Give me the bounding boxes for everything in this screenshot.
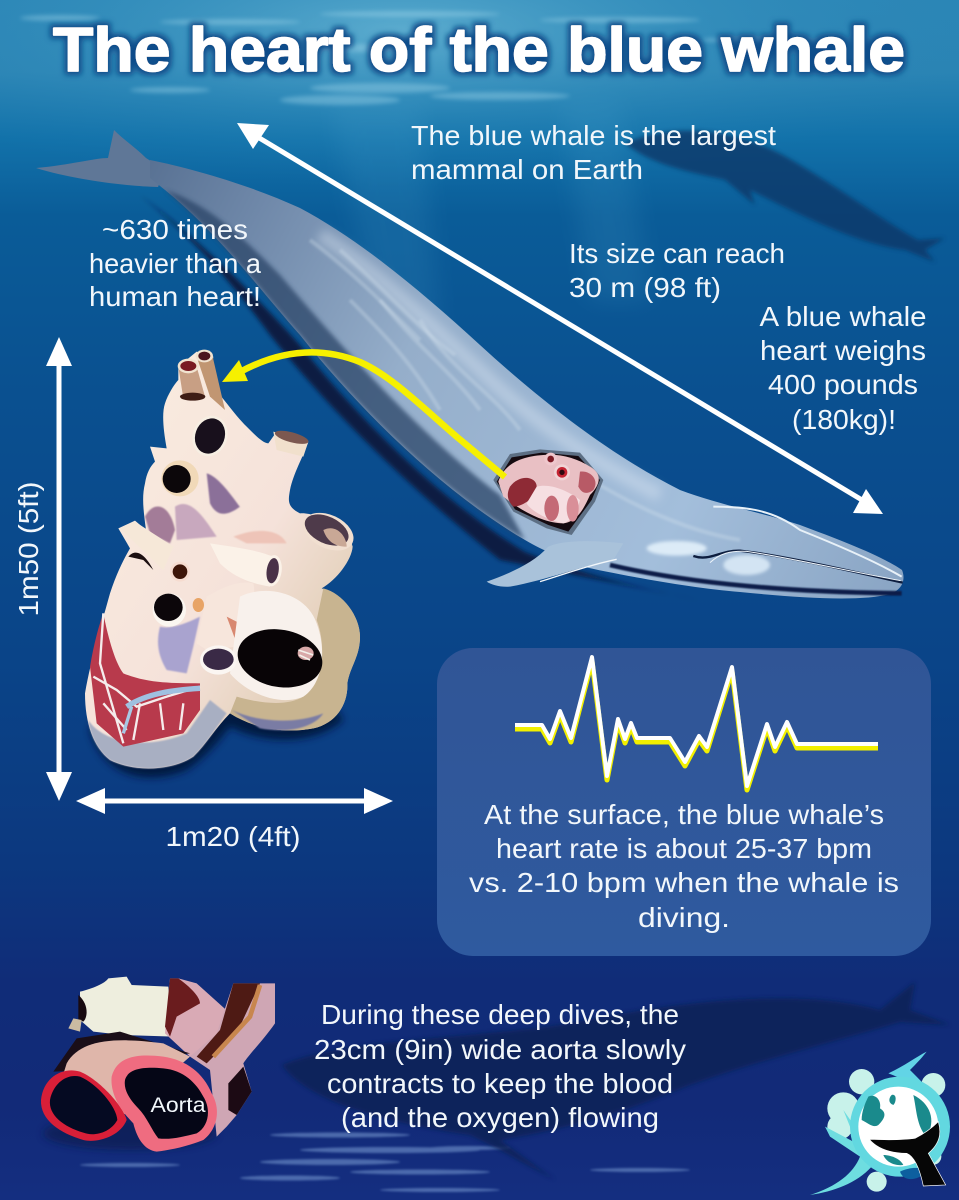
logo whale tail [869, 1122, 946, 1186]
text: heart weight: 400 pounds [768, 369, 918, 400]
height label: 1m50 (5ft) [13, 482, 44, 616]
aorta illustration [41, 977, 275, 1152]
text: heart weight [760, 301, 926, 435]
heart-rate text: diving. [638, 902, 730, 933]
text: heart weight: A blue whale [760, 301, 926, 332]
text: whale size [569, 238, 785, 303]
heart-rate text: heart rate is about 25-37 bpm [496, 833, 872, 864]
heart-rate text [469, 799, 899, 933]
text: heavier than human heart [89, 214, 261, 312]
whale head highlights [647, 541, 707, 556]
upper shadows [207, 473, 240, 514]
text: heart weight: (180kg)! [792, 404, 896, 435]
whale heart cutout [493, 449, 603, 535]
text: deep dives: 23cm (9in) wide aorta slowly [314, 1034, 686, 1065]
heart body [85, 352, 360, 768]
whale flipper [487, 541, 623, 587]
yellow pointer arrow [222, 352, 505, 477]
text: whale size: 30 m (98 ft) [569, 272, 721, 303]
left vessel tube [50, 1040, 190, 1127]
striped right vessel [190, 983, 275, 1137]
vessel openings [187, 411, 233, 461]
height arrow [46, 337, 72, 801]
lower tube [200, 645, 237, 675]
aorta label: Aorta [150, 1094, 206, 1117]
panel: heart rate [437, 648, 931, 956]
logo splash [827, 1069, 945, 1192]
heart shadow [90, 647, 343, 778]
text: largest mammal [411, 120, 776, 185]
text: heavier than human heart: human heart! [89, 281, 261, 312]
lower left blue-grey apex [88, 700, 227, 768]
blue whale illustration [36, 130, 904, 600]
whale texture [310, 240, 740, 540]
top vessels [178, 367, 205, 398]
width arrow [76, 788, 393, 814]
whale dorsal highlight [320, 235, 660, 495]
heart-rate trace [515, 657, 878, 790]
logo: globe and whale tail [810, 1052, 950, 1195]
title: The heart of the blue whale [53, 16, 905, 85]
left lumen [41, 1070, 127, 1141]
text: deep dives: During these deep dives, the [321, 999, 679, 1030]
heart illustration [85, 350, 360, 778]
text: heavier than human heart: heavier than a [89, 248, 261, 279]
background whale silhouette: top right [625, 131, 945, 262]
heart-rate text: vs. 2-10 bpm when the whale is [469, 867, 899, 898]
text: heavier than human heart: ~630 times [102, 214, 248, 245]
background whale silhouette: bottom [282, 982, 950, 1180]
upper pale vessel [80, 977, 173, 1037]
text: deep dives: contracts to keep the blood [327, 1068, 673, 1099]
logo globe [858, 1087, 938, 1167]
whale mouth line [693, 551, 903, 583]
whale body [150, 160, 904, 598]
large aortic opening [230, 591, 322, 700]
heart-rate text: At the surface, the blue whale’s [484, 799, 884, 830]
left dark back [53, 1032, 190, 1072]
aorta shadow [43, 1117, 217, 1150]
text: largest mammal: mammal on Earth [411, 154, 643, 185]
pink vessel [165, 978, 230, 1057]
text: whale size: Its size can reach [569, 238, 785, 269]
width label: 1m20 (4ft) [166, 821, 300, 852]
text: deep dives [314, 999, 686, 1133]
text: deep dives: (and the oxygen) flowing [341, 1102, 659, 1133]
text: largest mammal: The blue whale is the largest [411, 120, 776, 151]
aorta lumen ring [111, 1056, 217, 1152]
whale tail fluke [36, 130, 165, 187]
whale belly shading [165, 190, 525, 540]
veined myocardium [90, 613, 200, 747]
lower right muscle shading [230, 588, 360, 730]
size arrow [237, 123, 883, 514]
text: heart weight: heart weighs [760, 335, 926, 366]
